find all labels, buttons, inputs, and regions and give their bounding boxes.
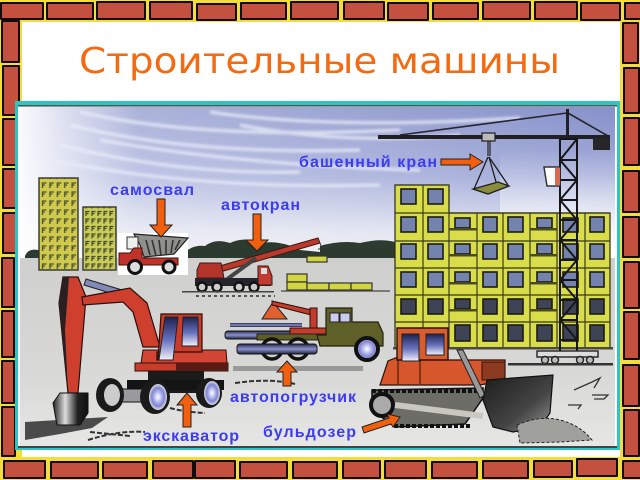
excavator bbox=[25, 277, 295, 440]
sky bbox=[20, 107, 615, 262]
ground bbox=[20, 258, 615, 446]
yellow blocks bbox=[281, 256, 390, 291]
label: экскаватор: экскаватор bbox=[143, 428, 239, 445]
title: Строительные машины bbox=[79, 41, 560, 82]
label: башенный кран: башенный кран bbox=[299, 154, 437, 171]
label: автопогрузчик: автопогрузчик bbox=[230, 389, 357, 406]
label: самосвал: самосвал bbox=[110, 182, 194, 199]
short building left bbox=[83, 207, 116, 270]
tall building left bbox=[39, 178, 78, 270]
arrow: башенный кран bbox=[441, 154, 483, 170]
dump truck bbox=[118, 233, 188, 275]
bulldozer bbox=[371, 328, 608, 443]
tower crane bbox=[378, 109, 613, 366]
truck with pipes (autoloader) bbox=[225, 301, 383, 371]
arrow: бульдозер bbox=[362, 414, 400, 433]
arrow: экскаватор bbox=[177, 393, 197, 427]
arrow: автопогрузчик bbox=[277, 361, 297, 386]
illustration: construction site bbox=[18, 105, 617, 448]
picture frame bbox=[15, 101, 620, 450]
apartment building under construction bbox=[393, 185, 613, 350]
truck crane bbox=[182, 238, 322, 296]
label: бульдозер: бульдозер bbox=[263, 424, 356, 441]
arrow: самосвал bbox=[150, 199, 172, 237]
arrow: автокран bbox=[246, 214, 268, 251]
label: автокран: автокран bbox=[221, 197, 300, 214]
labels bbox=[110, 154, 437, 445]
tree line bbox=[25, 240, 395, 258]
